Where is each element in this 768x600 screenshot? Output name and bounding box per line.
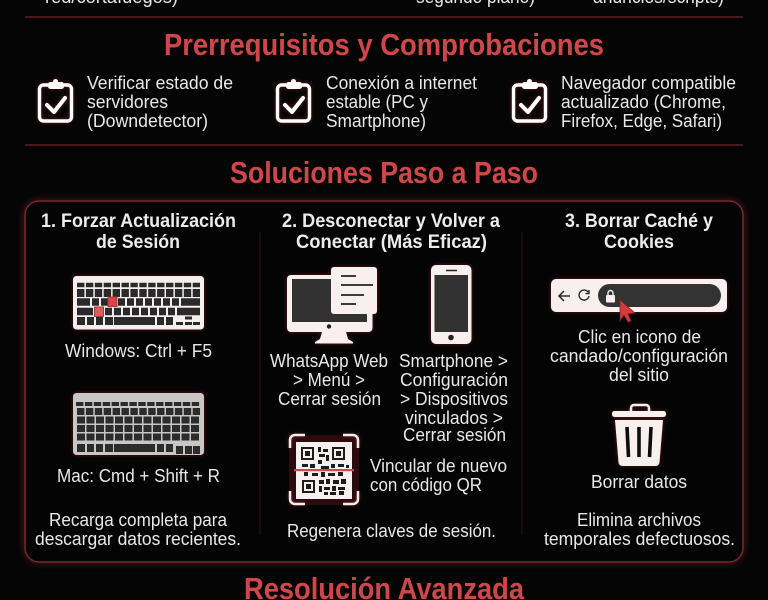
- icon: windows keyboard: [73, 276, 204, 330]
- label: clic en candado: candado/configuración: [550, 346, 728, 366]
- heading: prerrequisitos: Prerrequisitos y Comprobaciones: [164, 27, 604, 62]
- checklist item 3: actualizado (Chrome,: [561, 92, 726, 112]
- checklist item 2: Conexión a internet: [326, 73, 477, 93]
- step title 3: Cookies: [604, 232, 674, 253]
- note: recarga: Recarga completa para: [49, 510, 228, 530]
- label: smartphone steps: [399, 351, 508, 445]
- icon: mac keyboard: [73, 393, 204, 455]
- checklist item 3: Firefox, Edge, Safari): [561, 111, 722, 131]
- step title 2: [282, 211, 500, 253]
- checklist item 3: [514, 73, 736, 131]
- label: smartphone steps: > Dispositivos: [400, 389, 508, 409]
- label: vincular qr: con código QR: [370, 475, 482, 495]
- previous section cut-off text: [45, 0, 724, 7]
- label: mac shortcut: Mac: Cmd + Shift + R: [57, 466, 220, 486]
- step title 1: de Sesión: [96, 232, 180, 253]
- icon: trash can: [612, 405, 666, 466]
- icon: clipboard check: [40, 79, 72, 121]
- step title 1: [41, 211, 236, 253]
- note: regenera: Regenera claves de sesión.: [287, 521, 496, 541]
- label: smartphone steps: Configuración: [400, 370, 508, 390]
- icon: desktop with menu: [287, 267, 377, 344]
- label: clic en candado: Clic en icono de: [578, 327, 701, 347]
- checklist item 3: Navegador compatible: [561, 73, 736, 93]
- label: borrar datos: Borrar datos: [591, 472, 687, 492]
- checklist item 2: Smartphone): [326, 111, 426, 131]
- checklist item 2: [278, 73, 477, 131]
- label: windows shortcut: Windows: Ctrl + F5: [65, 341, 212, 361]
- label: clic en candado: [550, 327, 728, 385]
- label: whatsapp web steps: WhatsApp Web: [270, 351, 388, 371]
- column 2: desconectar: [270, 211, 508, 541]
- step title 2: Conectar (Más Eficaz): [296, 232, 487, 253]
- label: whatsapp web steps: [270, 351, 388, 409]
- icon: smartphone: [431, 265, 472, 344]
- note: recarga: [35, 510, 241, 549]
- icon: red cursor: [620, 300, 635, 322]
- note: elimina: Elimina archivos: [577, 510, 701, 530]
- column 1: forzar actualización: [35, 211, 241, 549]
- column 3: borrar caché: [544, 211, 735, 549]
- step title 3: 3. Borrar Caché y: [565, 211, 713, 232]
- icon: browser address bar: [551, 279, 727, 322]
- note: elimina: temporales defectuosos.: [544, 529, 735, 549]
- checklist item 1: Verificar estado de: [87, 73, 233, 93]
- checklist item 1: [40, 73, 233, 131]
- step title 2: 2. Desconectar y Volver a: [282, 211, 500, 232]
- checklist item 1: (Downdetector): [87, 111, 208, 131]
- icon: qr code scan: [289, 435, 359, 505]
- label: whatsapp web steps: Cerrar sesión: [278, 389, 381, 409]
- panel: solutions: [25, 201, 743, 562]
- label: smartphone steps: Cerrar sesión: [403, 425, 506, 445]
- step title 1: 1. Forzar Actualización: [41, 211, 236, 232]
- checklist item 1: servidores: [87, 92, 168, 112]
- checklist item 2: estable (PC y: [326, 92, 428, 112]
- label: vincular qr: [370, 456, 507, 495]
- label: smartphone steps: Smartphone >: [399, 351, 508, 371]
- icon: clipboard check: [278, 79, 310, 121]
- label: clic en candado: del sitio: [609, 365, 669, 385]
- label: vincular qr: Vincular de nuevo: [370, 456, 507, 476]
- note: elimina: [544, 510, 735, 549]
- label: smartphone steps: vinculados >: [405, 408, 503, 428]
- heading: soluciones: Soluciones Paso a Paso: [230, 155, 538, 190]
- icon: clipboard check: [514, 79, 546, 121]
- step title 3: [565, 211, 713, 253]
- note: recarga: descargar datos recientes.: [35, 529, 241, 549]
- label: whatsapp web steps: > Menú >: [293, 370, 365, 390]
